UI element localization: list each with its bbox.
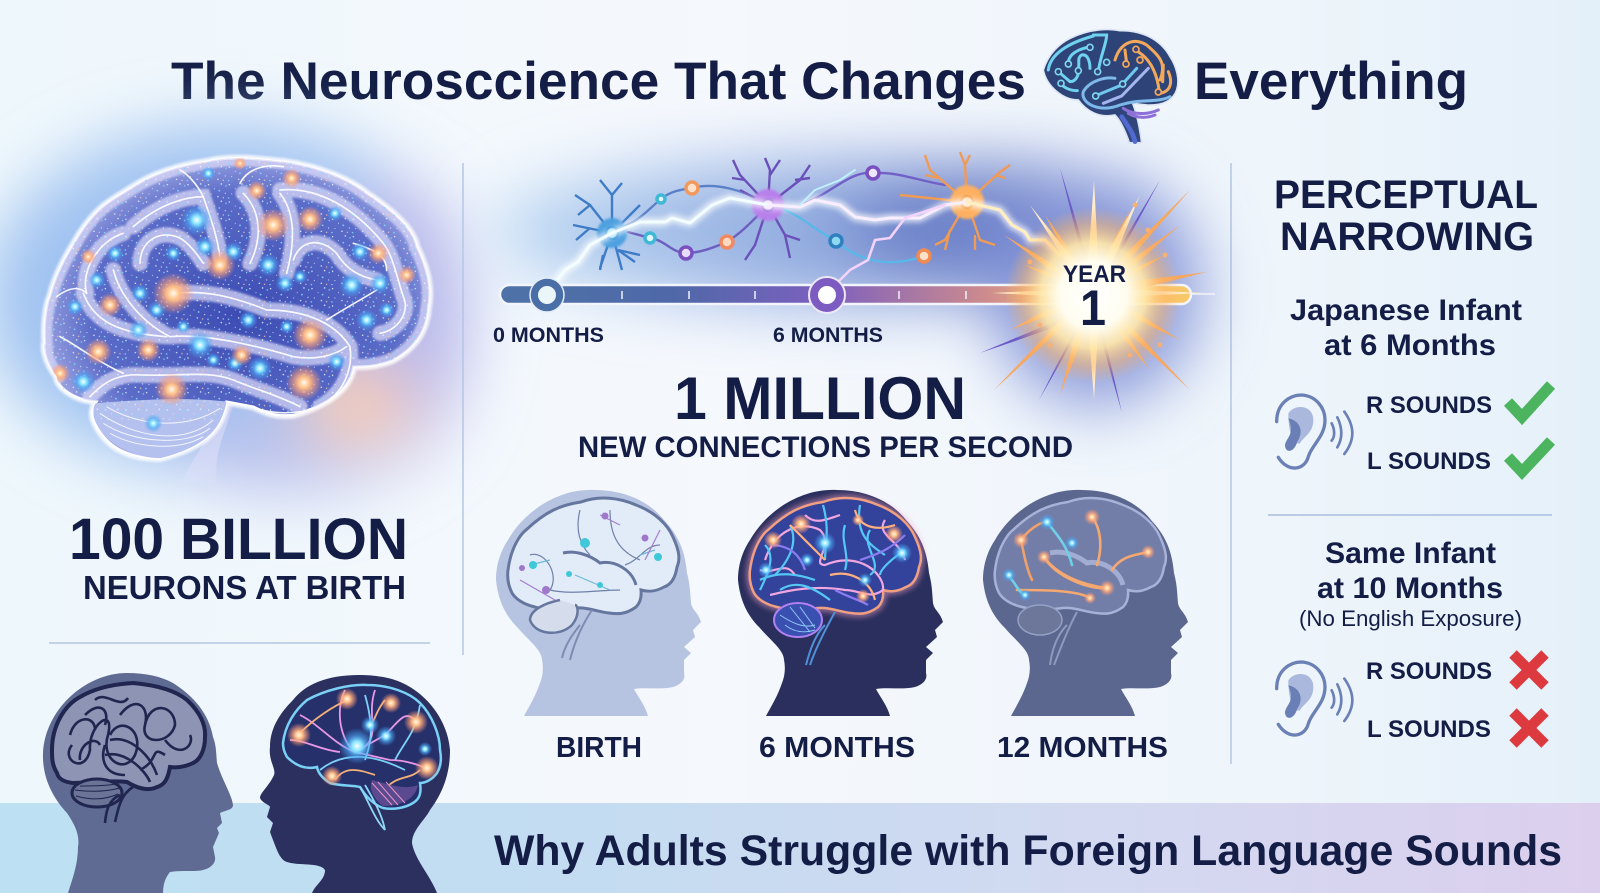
icon: ear with sound waves (1277, 395, 1352, 468)
title: The Neurosccience That Changes (171, 52, 1026, 111)
neuron: blue (573, 180, 640, 270)
timeline (493, 168, 1215, 413)
icon: circuit brain logo (1043, 29, 1178, 143)
sound rows: 10 months: L SOUNDS (1367, 716, 1491, 743)
big stat: 100 billion neurons: 100 BILLION (69, 507, 408, 572)
marker: 0 months (530, 278, 564, 312)
adult vs infant heads (43, 673, 450, 893)
small connection nodes (645, 167, 930, 262)
adult head (43, 673, 233, 893)
right heading: perceptual narrowing: PERCEPTUAL (1274, 173, 1538, 217)
brain stem (182, 402, 233, 483)
big stat: 1 million connections: 1 MILLION (674, 365, 966, 432)
head: birth (496, 490, 701, 716)
bottom banner band (0, 803, 1600, 893)
timeline labels: 0 MONTHS (493, 324, 604, 347)
sound rows: 6 months (1366, 392, 1492, 475)
neuron network (547, 152, 1060, 294)
brain body (44, 158, 430, 458)
head: 6 months (738, 490, 943, 716)
connection curves (625, 173, 945, 262)
sound rows: 6 months: R SOUNDS (1366, 392, 1492, 419)
subheading: 6 months: at 6 Months (1324, 329, 1496, 362)
illustration: glowing brain (40, 153, 433, 483)
big stat: 100 billion neurons: NEURONS AT BIRTH (83, 569, 406, 606)
title (171, 52, 1468, 111)
gyri lines (57, 166, 405, 413)
right heading: perceptual narrowing: NARROWING (1280, 215, 1534, 259)
title: Everything (1194, 52, 1468, 111)
icon: ear with sound waves (1277, 662, 1352, 735)
subheading: 6 months (1290, 294, 1522, 362)
head stage labels (556, 732, 1168, 764)
subheading: 10 months (1299, 537, 1522, 631)
sound rows: 10 months (1366, 658, 1492, 743)
banner text: Why Adults Struggle with Foreign Language Sounds (494, 827, 1562, 875)
icon: cross marks (1513, 654, 1545, 744)
year 1 burst (980, 168, 1215, 413)
big stat: 1 million connections: NEW CONNECTIONS PER SECOND (578, 431, 1073, 464)
timeline glow background (490, 160, 1200, 405)
cerebellum (93, 399, 227, 458)
head stage labels: 6 MONTHS (759, 732, 915, 764)
subheading: 10 months: at 10 Months (1317, 572, 1503, 605)
icon: check marks (1508, 385, 1551, 472)
sound rows: 6 months: L SOUNDS (1367, 448, 1491, 475)
timeline bar (500, 285, 1191, 304)
neuron: purple (732, 158, 810, 260)
head: 12 months (983, 490, 1188, 716)
outer white glow (44, 158, 430, 458)
subheading: 10 months: (No English Exposure) (1299, 606, 1522, 631)
outer cortex sheen (44, 158, 430, 407)
sound rows: 10 months: R SOUNDS (1366, 658, 1492, 685)
glow behind big brain (0, 125, 470, 495)
lightning arcs (547, 170, 1060, 294)
timeline: 6 MONTHS (773, 324, 883, 347)
marker: 6 months (809, 277, 845, 313)
head stage labels: 12 MONTHS (997, 732, 1168, 764)
subheading: 6 months: Japanese Infant (1290, 294, 1522, 327)
neuron: orange (900, 152, 1010, 250)
year 1 burst: 1 (1080, 280, 1106, 336)
big stat: 1 million connections (578, 365, 1073, 464)
subheading: 10 months: Same Infant (1325, 537, 1496, 570)
big stat: 100 billion neurons (69, 507, 408, 606)
infant head (260, 675, 450, 893)
right heading: perceptual narrowing (1274, 173, 1538, 259)
neuron sparks (66, 166, 395, 433)
year 1 burst: YEAR (1063, 261, 1126, 288)
head stage labels: BIRTH (556, 732, 642, 764)
